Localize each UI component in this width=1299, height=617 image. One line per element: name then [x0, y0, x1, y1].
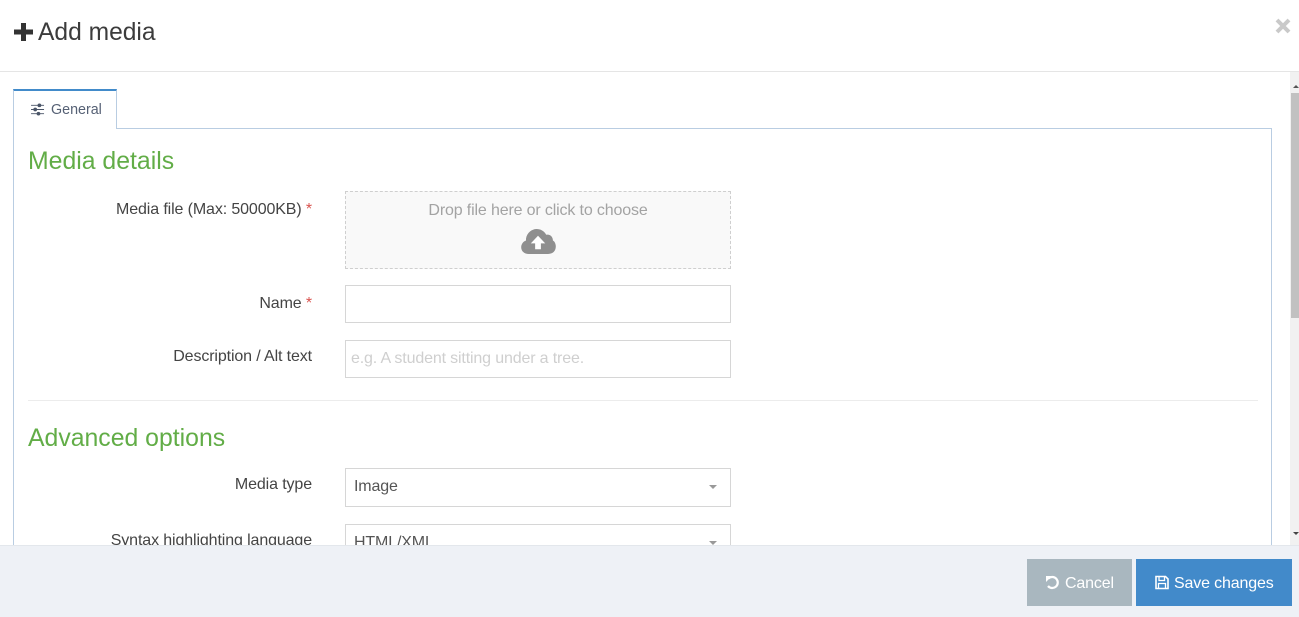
select value: Image	[354, 478, 398, 495]
caret	[709, 541, 717, 545]
select: Syntax	[345, 524, 731, 563]
icon: plus	[14, 23, 33, 41]
modal header	[0, 0, 1299, 72]
dropzone text: Drop file here or click to choose	[428, 202, 648, 219]
icon: undo	[1046, 576, 1059, 590]
tab panel	[13, 128, 1272, 558]
cancel text: Cancel	[1065, 575, 1114, 592]
input: Name	[345, 285, 731, 323]
label: Media file: Media file (Max: 50000KB) *	[116, 201, 312, 218]
icon: close	[1276, 18, 1290, 34]
select: Media type	[345, 468, 731, 507]
save text: Save changes	[1174, 575, 1274, 592]
scrollbar	[1290, 72, 1299, 545]
button: Cancel	[1027, 559, 1132, 606]
scroll thumb	[1291, 93, 1299, 318]
icon: cloud upload	[521, 229, 556, 254]
label: Syntax: Syntax highlighting language	[111, 532, 312, 549]
label: Name: Name *	[259, 295, 312, 312]
tab label: General	[51, 102, 102, 118]
label: Description: Description / Alt text	[173, 348, 312, 365]
caret	[709, 485, 717, 489]
title: Add media	[38, 19, 156, 46]
arrow down	[1293, 532, 1299, 535]
heading: Advanced options: Advanced options	[28, 425, 225, 452]
icon: sliders	[31, 104, 44, 116]
placeholder: e.g. A student sitting under a tree.	[351, 350, 584, 367]
tab: General	[13, 89, 117, 129]
input: Description	[345, 340, 731, 378]
button: Save changes	[1136, 559, 1292, 606]
label: Media type: Media type	[235, 476, 312, 493]
divider	[28, 400, 1258, 401]
select value: HTML/XML	[354, 534, 434, 551]
arrow up	[1293, 85, 1299, 88]
footer	[0, 545, 1299, 617]
icon: save	[1155, 576, 1169, 590]
heading: Media details: Media details	[28, 148, 174, 175]
dropzone	[345, 191, 731, 269]
